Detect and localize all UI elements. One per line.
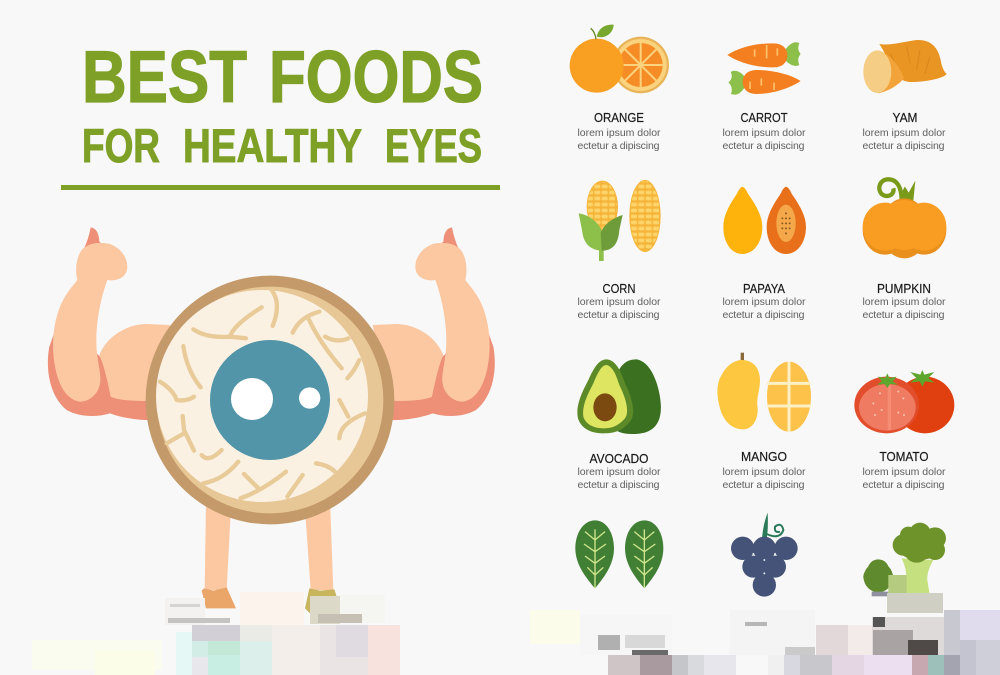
food descriptions: ectetur a dipiscing: [722, 140, 805, 152]
food descriptions: lorem ipsum dolor: [722, 296, 806, 308]
blood vessels: [160, 290, 365, 498]
food labels: TOMATO: [880, 449, 928, 464]
left arm: [48, 227, 170, 420]
food: yam: [863, 40, 947, 93]
food descriptions: lorem ipsum dolor: [578, 296, 661, 308]
food: orange: [570, 25, 669, 93]
food descriptions: ectetur a dipiscing: [862, 140, 945, 152]
legs: [205, 500, 333, 590]
food descriptions: lorem ipsum dolor: [578, 127, 661, 139]
food: pumpkin: [863, 179, 946, 258]
eyeball character with muscular arms: [48, 227, 495, 617]
food: grapes: [731, 513, 798, 597]
title: EYES: [385, 119, 482, 172]
food labels: ORANGE: [594, 110, 644, 125]
food descriptions: [578, 127, 946, 491]
corrupted image blocks along the bottom edge: [32, 592, 1000, 675]
food: mango: [717, 353, 811, 432]
food labels: CARROT: [740, 110, 788, 125]
food: tomato: [854, 370, 954, 433]
food: spinach: [575, 520, 663, 588]
food labels: YAM: [892, 110, 918, 125]
food descriptions: lorem ipsum dolor: [862, 127, 946, 139]
iris and highlights: [210, 340, 330, 460]
food: corn: [579, 180, 661, 261]
food labels: PUMPKIN: [877, 281, 931, 296]
food descriptions: lorem ipsum dolor: [578, 466, 661, 478]
eyeball: [146, 276, 394, 524]
food labels: CORN: [602, 281, 636, 296]
food labels: AVOCADO: [590, 451, 648, 466]
food descriptions: ectetur a dipiscing: [722, 479, 805, 491]
food descriptions: lorem ipsum dolor: [722, 127, 806, 139]
title: FOR: [82, 119, 160, 172]
food descriptions: lorem ipsum dolor: [862, 466, 946, 478]
food: papaya: [723, 187, 806, 254]
food: broccoli: [863, 523, 946, 597]
title: FOODS: [269, 37, 483, 118]
title: HEALTHY: [183, 119, 362, 172]
food descriptions: ectetur a dipiscing: [722, 309, 805, 321]
title: [82, 37, 483, 172]
food: carrot: [727, 42, 801, 95]
food labels: PAPAYA: [743, 281, 785, 296]
food descriptions: ectetur a dipiscing: [862, 479, 945, 491]
food descriptions: ectetur a dipiscing: [578, 140, 660, 152]
food descriptions: ectetur a dipiscing: [862, 309, 945, 321]
food descriptions: lorem ipsum dolor: [862, 296, 946, 308]
food descriptions: ectetur a dipiscing: [578, 309, 660, 321]
food descriptions: ectetur a dipiscing: [578, 479, 660, 491]
food: avocado: [577, 359, 661, 434]
food descriptions: lorem ipsum dolor: [722, 466, 806, 478]
title: BEST: [82, 37, 247, 118]
right arm: [373, 227, 495, 420]
food labels: MANGO: [741, 449, 787, 464]
shoes: [202, 587, 343, 617]
food labels: [590, 110, 931, 466]
